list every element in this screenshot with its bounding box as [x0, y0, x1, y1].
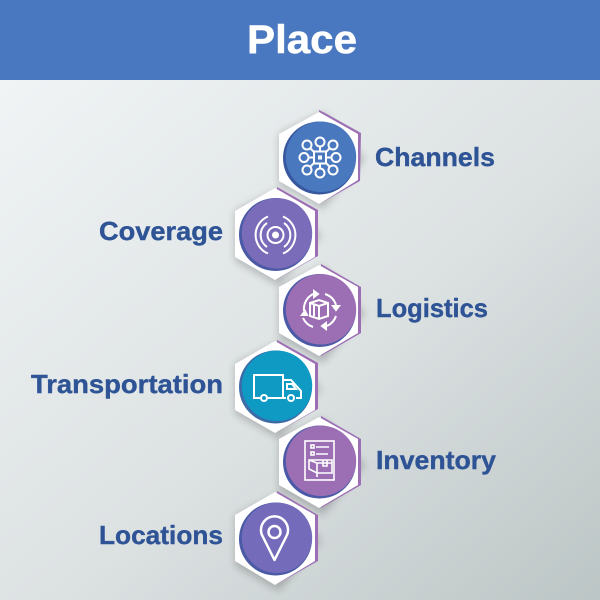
item: Logistics: [279, 264, 365, 363]
item: Coverage: [235, 187, 321, 286]
label: Channels: Channels: [375, 142, 495, 172]
icon: map pin: [261, 516, 288, 560]
icon: package cycle: [302, 291, 339, 329]
label: Transportation: Transportation: [31, 369, 223, 399]
label: Logistics: Logistics: [376, 293, 488, 323]
item: Transportation: [235, 340, 321, 439]
title: Place: [247, 18, 357, 62]
icon: signal rings: [256, 216, 295, 254]
icon: inventory list: [305, 441, 334, 480]
item: Inventory: [279, 416, 365, 515]
header band: [0, 0, 600, 80]
label: Inventory: Inventory: [376, 445, 497, 475]
label: Locations: Locations: [99, 520, 223, 550]
label: Coverage: Coverage: [99, 216, 223, 246]
item: Locations: [235, 491, 321, 591]
item: Channels: [279, 110, 365, 209]
icon: truck: [254, 375, 301, 401]
icon: network hub: [300, 138, 340, 178]
